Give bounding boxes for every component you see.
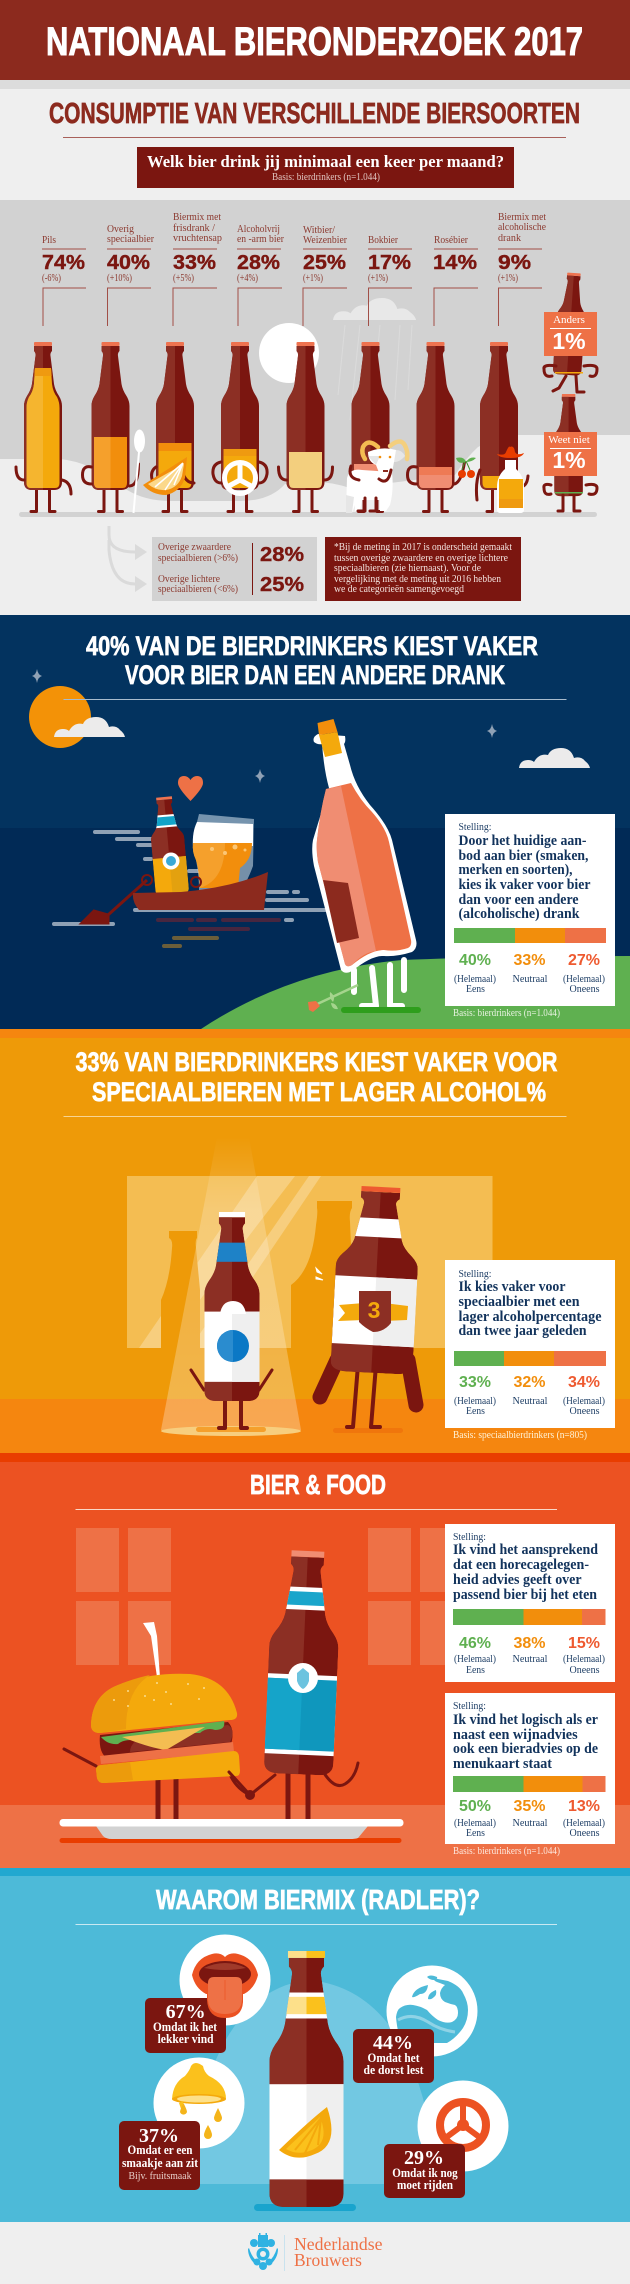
panel: stelling bier: 27% — [568, 952, 600, 969]
heading: waarom biermix: WAAROM BIERMIX (RADLER)? — [156, 1884, 480, 1915]
column labels and percentages: (+4%) — [237, 273, 258, 284]
burger character — [64, 1622, 250, 1819]
panel: stelling bieradvies menukaart: Stelling: — [453, 1701, 486, 1712]
window with shadow bottles — [127, 1176, 492, 1348]
callout: 37% smaakje — [119, 2121, 200, 2190]
panel: stelling alcohol: dan twee jaar geleden — [458, 1323, 587, 1339]
callout: 29% rijden: 29% — [404, 2147, 444, 2169]
panel: stelling bier: merken en soorten), — [458, 862, 573, 878]
section background: amber — [0, 1029, 630, 1453]
panel: stelling bier: bod aan bier (smaken, — [458, 848, 589, 864]
bottle: number 3 — [312, 1186, 424, 1433]
panel: stelling bieradvies menukaart: ook een bieradvies op de — [453, 1741, 598, 1757]
panel: stelling bier: (Helemaal) — [563, 974, 605, 985]
column labels and percentages: (+5%) — [173, 273, 194, 284]
icon: spoon — [134, 430, 145, 513]
radler bottle — [254, 1951, 356, 2211]
panel: stelling bier: kies ik vaker voor bier — [458, 877, 591, 893]
sign: weet niet 1%: 1% — [552, 447, 586, 473]
column labels and percentages: speciaalbier — [107, 234, 154, 245]
panel: speciaalbier split: Overige zwaardere — [158, 542, 231, 553]
bottle: witbier 25% — [278, 342, 332, 512]
arrows to sub-categories — [109, 526, 147, 592]
icon: orange slice — [143, 457, 187, 495]
panel: stelling bier — [445, 814, 615, 1006]
column labels and percentages: Weizenbier — [303, 235, 347, 246]
panel: stelling bieradvies menukaart: Eens — [466, 1828, 485, 1839]
logo: Nederlandse Brouwers — [248, 2233, 382, 2271]
panel: stelling alcohol: Oneens — [570, 1406, 600, 1417]
column labels and percentages: Witbier/ — [303, 225, 335, 236]
callout: 44% dorst — [353, 2029, 434, 2083]
panel: stelling bier: dan voor een andere — [458, 892, 579, 908]
callout: 29% rijden: Omdat ik nog — [392, 2165, 458, 2180]
water reflections — [54, 832, 325, 946]
bottle: number 3: 3 — [368, 1297, 380, 1323]
panel: stelling alcohol: (Helemaal) — [563, 1396, 605, 1407]
panel: speciaalbier split: speciaalbieren (>6%) — [158, 553, 238, 564]
icon: rose on the ground — [308, 985, 358, 1012]
note box: *Bij de meting in 2017 is onderscheid gemaakt — [334, 542, 512, 553]
small beer bottle — [151, 796, 189, 892]
column labels and percentages: alcoholische — [498, 222, 546, 233]
panel: stelling bieradvies menukaart: (Helemaal) — [563, 1818, 605, 1829]
panel: stelling bieradvies menukaart: (Helemaal) — [454, 1818, 496, 1829]
sign: weet niet 1% — [544, 432, 597, 476]
panel: speciaalbier split: speciaalbieren (<6%) — [158, 584, 238, 595]
bottle: food — [229, 1549, 363, 1819]
icon: circle with water wave — [386, 1966, 478, 2056]
bottle: rosebier 14% — [408, 342, 464, 512]
panel: stelling bier: Eens — [466, 984, 485, 995]
callout: 44% dorst: de dorst lest — [364, 2062, 424, 2077]
panel: stelling bieradvies menukaart: Oneens — [570, 1828, 600, 1839]
column labels and percentages: (+1%) — [498, 273, 518, 284]
column labels and percentages: Biermix met — [498, 212, 546, 223]
question box: Welk bier drink jij minimaal een keer per maand? — [147, 152, 504, 171]
bottle: speciaalbier 40% — [82, 342, 138, 512]
panel: stelling horeca advies: Oneens — [570, 1665, 600, 1676]
callout: 37% smaakje: smaakje aan zit — [122, 2155, 199, 2170]
heading: 40% — [64, 631, 566, 700]
rosé bottle character — [312, 719, 421, 1013]
column labels and percentages: 33% — [173, 252, 216, 274]
note box: speciaalbieren (zie hiernaast). Voor de — [334, 563, 481, 574]
column labels and percentages — [42, 212, 546, 326]
callout: 67% lekker: 67% — [166, 2001, 206, 2023]
heading: 33% — [64, 1047, 566, 1117]
scene background with hills — [0, 200, 630, 681]
panel: stelling horeca advies: (Helemaal) — [454, 1654, 496, 1665]
section background: radler — [0, 1868, 630, 2222]
callout: 44% dorst: Omdat het — [368, 2050, 420, 2065]
panel: stelling alcohol: Ik kies vaker voor — [458, 1279, 566, 1295]
panel: stelling horeca advies: 38% — [514, 1635, 546, 1652]
basis note: Basis: bierdrinkers (n=1.044) — [453, 1846, 560, 1857]
title banner — [0, 0, 630, 89]
panel: stelling bieradvies menukaart: 50% — [459, 1798, 491, 1815]
panel: stelling bier: Neutraal — [512, 974, 548, 985]
panel: speciaalbier split: Overige lichtere — [158, 574, 220, 585]
panel: stelling bieradvies menukaart: naast een wijnadvies — [453, 1727, 578, 1743]
bottle: pils 74% — [16, 342, 71, 512]
note box — [325, 537, 521, 601]
panel: stelling bier: (alcoholische) drank — [458, 906, 580, 922]
panel: stelling bieradvies menukaart: 35% — [514, 1798, 546, 1815]
panel: stelling horeca advies: Neutraal — [512, 1654, 548, 1665]
column labels and percentages: (+1%) — [303, 273, 323, 284]
logo: Nederlandse Brouwers: Nederlandse — [294, 2234, 382, 2254]
column labels and percentages: (+1%) — [368, 273, 388, 284]
column labels and percentages: drank — [498, 233, 522, 244]
callout: 37% smaakje: Omdat er een — [128, 2142, 193, 2157]
panel: stelling bier: Oneens — [570, 984, 600, 995]
heading: 40%: VOOR BIER DAN EEN ANDERE DRANK — [125, 660, 505, 690]
column labels and percentages: vruchtensap — [173, 233, 222, 244]
question box — [137, 147, 514, 188]
callout: 67% lekker: Omdat ik het — [153, 2019, 218, 2034]
column labels and percentages: 14% — [433, 252, 477, 274]
panel: stelling bieradvies menukaart — [445, 1693, 615, 1844]
panel: stelling alcohol: lager alcoholpercentage — [458, 1309, 602, 1325]
callout: 29% rijden: moet rijden — [397, 2177, 454, 2192]
panel: stelling bieradvies menukaart: Neutraal — [512, 1818, 548, 1829]
panel: stelling horeca advies: 46% — [459, 1635, 491, 1652]
column labels and percentages: Bokbier — [368, 235, 398, 246]
bottle: weet niet — [544, 394, 597, 511]
panel: speciaalbier split — [152, 537, 317, 601]
sign: anders 1% — [544, 312, 597, 356]
panel: stelling horeca advies: heid advies geeft over — [453, 1572, 582, 1588]
panel: stelling alcohol — [445, 1260, 615, 1428]
note box: we de categorieën samengevoegd — [334, 584, 465, 595]
panel: stelling horeca advies — [445, 1524, 615, 1682]
column labels and percentages: frisdrank / — [173, 223, 215, 234]
panel: stelling horeca advies: Eens — [466, 1665, 485, 1676]
panel: stelling horeca advies: Stelling: — [453, 1532, 486, 1543]
panel: stelling alcohol: speciaalbier met een — [458, 1294, 580, 1310]
column labels and percentages: Biermix met — [173, 212, 221, 223]
section background: night — [0, 615, 630, 1029]
column labels and percentages: Rosébier — [434, 235, 468, 246]
sparks — [316, 1268, 323, 1280]
column labels and percentages: en -arm bier — [237, 234, 284, 245]
icon: cherries — [456, 458, 476, 478]
panel: stelling alcohol: (Helemaal) — [454, 1396, 496, 1407]
sign: anders 1%: 1% — [552, 328, 586, 354]
panel: stelling bieradvies menukaart: menukaart staat — [453, 1756, 552, 1772]
bottle: biermix frisdrank 33% — [152, 342, 194, 512]
bottle: alcoholvrij 28% — [213, 342, 267, 512]
panel: stelling bier: Door het huidige aan- — [458, 833, 586, 849]
column labels and percentages: 25% — [303, 252, 346, 274]
panel: stelling alcohol: Stelling: — [458, 1269, 492, 1280]
bottle: biermix alcoholisch 9% — [476, 342, 528, 512]
note box: vergelijking met de meting uit 2016 hebben — [334, 574, 502, 585]
panel: speciaalbier split: 28% — [260, 544, 304, 566]
panel: stelling bieradvies menukaart: Ik vind het logisch als er — [453, 1712, 598, 1728]
bottle: bokbier 17% — [352, 342, 390, 512]
panel: stelling horeca advies: Ik vind het aansprekend — [453, 1542, 599, 1558]
panel: stelling horeca advies: 15% — [568, 1635, 600, 1652]
panel: stelling alcohol: 34% — [568, 1374, 600, 1391]
basis note: Basis: bierdrinkers (n=1.044) — [453, 1008, 560, 1019]
beer glass — [193, 814, 254, 890]
column labels and percentages: 40% — [107, 252, 150, 274]
panel: stelling bier: 40% — [459, 952, 491, 969]
panel: stelling alcohol: Neutraal — [512, 1396, 548, 1407]
panel: stelling bier: (Helemaal) — [454, 974, 496, 985]
note box: tussen overige zwaardere en overige lichtere — [334, 553, 508, 564]
spotlight — [161, 1137, 301, 1436]
question box: Basis: bierdrinkers (n=1.044) — [272, 172, 380, 183]
sign: weet niet 1%: Weet niet — [548, 434, 590, 446]
column labels and percentages: 28% — [237, 252, 280, 274]
icon: heart — [178, 776, 203, 801]
icon: circle behind mouth — [180, 1934, 270, 2026]
ground bar — [19, 512, 597, 517]
panel: stelling bier: Stelling: — [458, 822, 492, 833]
panel: stelling horeca advies: dat een horecagelegen- — [453, 1557, 589, 1573]
rowing boat — [82, 872, 268, 923]
panel: stelling horeca advies: passend bier bij het eten — [453, 1587, 598, 1603]
column labels and percentages: 9% — [498, 252, 531, 274]
basis note: Basis: speciaalbierdrinkers (n=805) — [453, 1430, 587, 1441]
section background: food — [0, 1453, 630, 1868]
heading: bier en food: BIER & FOOD — [250, 1469, 386, 1500]
callout: 37% smaakje: Bijv. fruitsmaak — [128, 2170, 192, 2182]
column labels and percentages: (-6%) — [42, 273, 61, 284]
bottle: white label — [188, 1212, 276, 1428]
panel: stelling alcohol: Eens — [466, 1406, 485, 1417]
panel: stelling bieradvies menukaart: 13% — [568, 1798, 600, 1815]
panel: speciaalbier split: 25% — [260, 574, 304, 596]
panel: stelling horeca advies: (Helemaal) — [563, 1654, 605, 1665]
column labels and percentages: Pils — [42, 235, 56, 246]
plate — [60, 1819, 404, 1843]
column labels and percentages: (+10%) — [107, 273, 132, 284]
callout: 29% rijden — [384, 2144, 465, 2198]
callout: 67% lekker — [145, 1998, 226, 2053]
callout: 44% dorst: 44% — [373, 2032, 413, 2054]
callout: 37% smaakje: 37% — [139, 2125, 179, 2147]
callout: 67% lekker: lekker vind — [158, 2031, 214, 2046]
panel: stelling alcohol: 32% — [514, 1374, 546, 1391]
column labels and percentages: Overig — [107, 224, 135, 235]
column labels and percentages: Alcoholvrij — [237, 224, 280, 235]
logo: Nederlandse Brouwers: Brouwers — [294, 2250, 362, 2270]
icon: steering wheel — [224, 462, 256, 494]
panel: stelling bier: 33% — [514, 952, 546, 969]
icon: mouth with tongue — [192, 1953, 258, 2018]
icon: tequila bottle with sombrero — [497, 447, 524, 513]
column labels and percentages: 17% — [368, 252, 411, 274]
icon: circle with steering wheel — [418, 2080, 508, 2172]
column labels and percentages: 74% — [42, 252, 85, 274]
sign: anders 1%: Anders — [553, 314, 585, 326]
bottle: anders — [544, 272, 597, 392]
panel: stelling alcohol: 33% — [459, 1374, 491, 1391]
icon: goat — [346, 441, 407, 513]
icon: circle with lemon — [154, 2058, 244, 2148]
